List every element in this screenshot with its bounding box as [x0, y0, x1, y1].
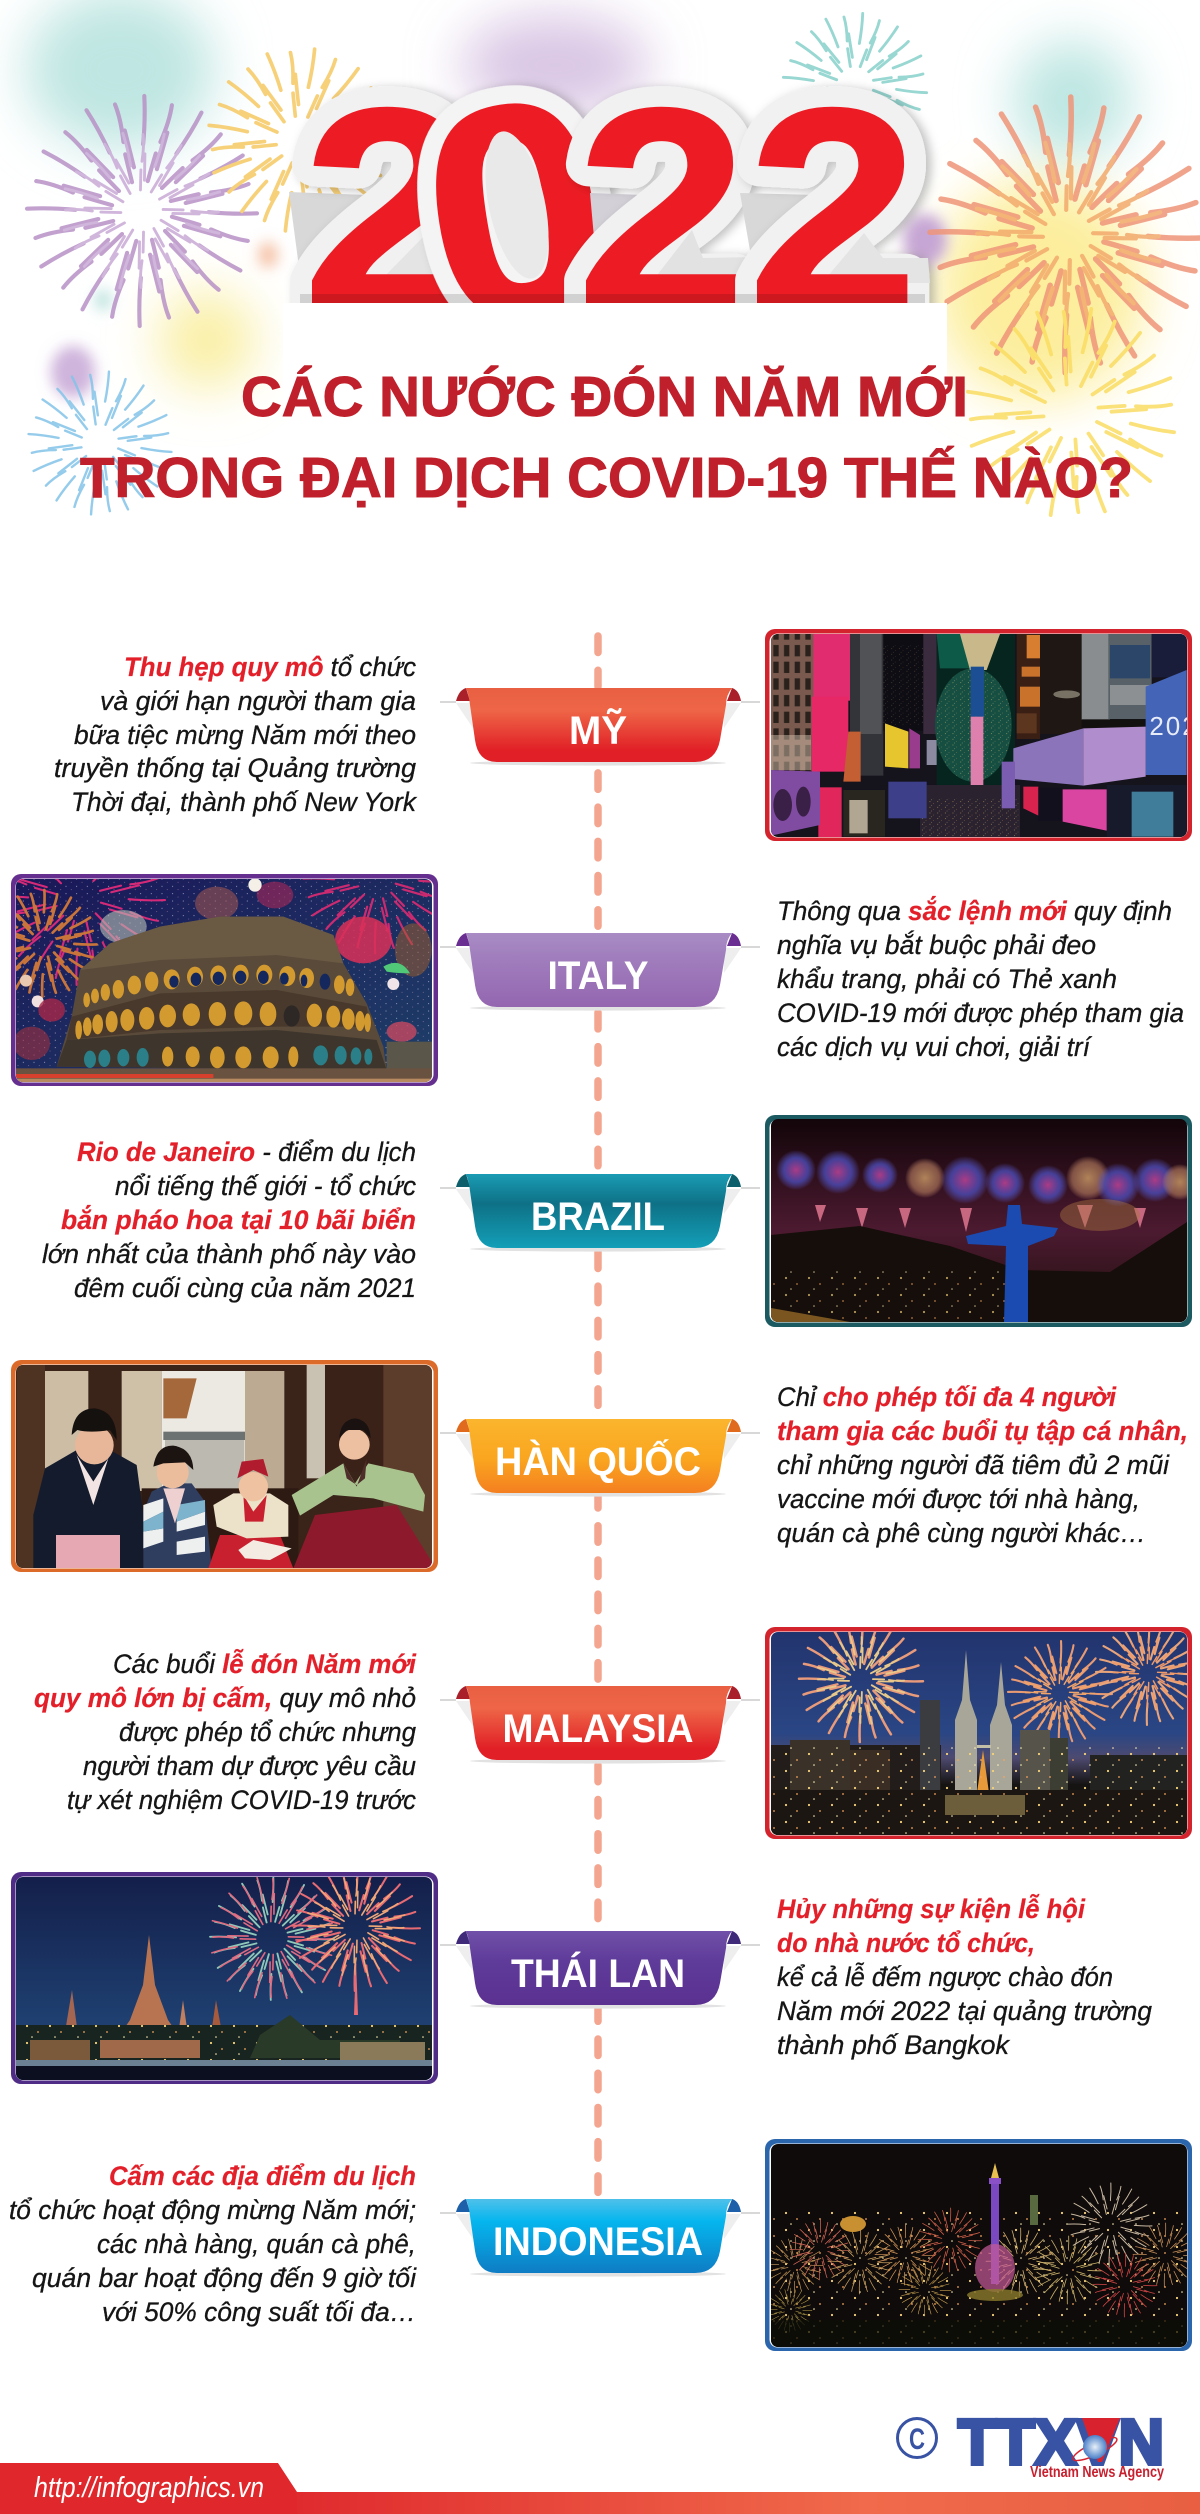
text: Brazil: đêm cuối cùng của năm 2021	[74, 1273, 416, 1303]
text: Italy: khẩu trang, phải có Thẻ xanh	[777, 964, 1117, 994]
text: Hàn Quốc	[777, 1382, 1188, 1548]
heading: 2022: 2	[748, 49, 918, 369]
text: Brazil	[42, 1137, 416, 1303]
header: blurred colour glows	[25, 0, 1145, 400]
heading: 2022: 0	[403, 31, 629, 391]
row: MALAYSIA	[34, 1618, 1200, 1839]
ribbon: Malaysia	[440, 1686, 760, 1764]
text: Indonesia: quán bar hoạt động đến 9 giờ tối	[32, 2263, 417, 2293]
row: MỸ	[54, 625, 1200, 845]
text: Italy: COVID-19 mới được phép tham gia	[777, 998, 1184, 1028]
text: Thái Lan: do nhà nước tổ chức,	[777, 1928, 1035, 1958]
text: Thái Lan: kể cả lễ đếm ngược chào đón	[777, 1961, 1113, 1992]
heading: 2022: 2	[577, 49, 747, 369]
text: Hàn Quốc: vaccine mới được tới nhà hàng,	[777, 1484, 1140, 1514]
photo: Rio fireworks	[765, 1115, 1198, 1327]
text: Mỹ: Thu hẹp quy mô tổ chức	[124, 652, 416, 682]
text: Malaysia: được phép tổ chức nhưng	[119, 1717, 416, 1747]
icon: copyright: C	[909, 2423, 925, 2456]
photo: Times Square	[760, 625, 1200, 845]
ribbon: Thái Lan: THÁI LAN	[511, 1951, 685, 1996]
ribbon: Malaysia: MALAYSIA	[502, 1707, 694, 1751]
text: Indonesia: với 50% công suất tối đa…	[102, 2297, 416, 2327]
text: Mỹ: Thời đại, thành phố New York	[71, 787, 417, 817]
heading: 2022	[283, 31, 947, 403]
text: Italy	[777, 895, 1184, 1062]
text: Malaysia	[34, 1648, 416, 1815]
photo: Kuala Lumpur	[765, 1618, 1200, 1839]
row: BRAZIL	[42, 1115, 1198, 1327]
ribbon: Thái Lan	[440, 1931, 760, 2009]
heading: subtitle: CÁC NƯỚC ĐÓN NĂM MỚI	[241, 365, 968, 429]
text: Thái Lan: Hủy những sự kiện lễ hội	[777, 1893, 1085, 1924]
header: firework bursts	[21, 7, 1200, 534]
ribbon: Indonesia: INDONESIA	[493, 2220, 703, 2264]
row: INDONESIA	[9, 2139, 1197, 2351]
row: HÀN QUỐC	[11, 1360, 1188, 1572]
row: THÁI LAN	[11, 1862, 1152, 2084]
photo: Jakarta	[765, 2139, 1197, 2351]
text: Malaysia: người tham dự được yêu cầu	[83, 1751, 416, 1781]
text: Mỹ: truyền thống tại Quảng trường	[54, 753, 416, 783]
text: Italy: Thông qua sắc lệnh mới quy định	[777, 895, 1172, 926]
heading: 2022: 2	[303, 49, 473, 369]
heading: 2022: 2	[577, 49, 747, 369]
text: Hàn Quốc: Chỉ cho phép tối đa 4 người	[777, 1382, 1116, 1412]
heading: 2022: 0	[403, 31, 629, 391]
text: Malaysia: tự xét nghiệm COVID-19 trước	[67, 1785, 416, 1815]
text: Indonesia: tổ chức hoạt động mừng Năm mới;	[9, 2195, 416, 2225]
ribbon: Mỹ: MỸ	[569, 707, 627, 753]
ribbon: Brazil	[440, 1174, 760, 1252]
ribbon: Italy: ITALY	[548, 954, 649, 998]
text: Hàn Quốc: tham gia các buổi tụ tập cá nhân,	[777, 1416, 1188, 1446]
text: Brazil: nổi tiếng thế giới - tổ chức	[115, 1171, 416, 1201]
footer bar: http://infographics.vn	[34, 2472, 264, 2504]
ribbon: Hàn Quốc: HÀN QUỐC	[495, 1438, 701, 1484]
text: Malaysia: Các buổi lễ đón Năm mới	[113, 1648, 416, 1679]
text: Brazil: Rio de Janeiro - điểm du lịch	[77, 1137, 416, 1167]
heading: 2022: 2	[303, 49, 473, 369]
text: Mỹ	[54, 652, 417, 817]
wordmark: Vietnam News Agency	[1030, 2464, 1164, 2481]
text: Indonesia: các nhà hàng, quán cà phê,	[97, 2229, 416, 2259]
text: Malaysia: quy mô lớn bị cấm, quy mô nhỏ	[34, 1683, 416, 1713]
photo: Korean family	[11, 1360, 438, 1572]
text: Mỹ: bữa tiệc mừng Năm mới theo	[74, 720, 416, 750]
logo: TTXVN	[898, 2406, 1164, 2481]
text: Hàn Quốc: quán cà phê cùng người khác…	[777, 1518, 1146, 1548]
text: Italy: nghĩa vụ bắt buộc phải đeo	[777, 929, 1096, 960]
icon: copyright	[898, 2418, 936, 2458]
text: Brazil: lớn nhất của thành phố này vào	[42, 1239, 416, 1269]
text: Brazil: bắn pháo hoa tại 10 bãi biển	[61, 1204, 416, 1235]
row: ITALY	[11, 874, 1184, 1086]
timeline dashed line	[594, 636, 602, 2193]
photo: Colosseum	[11, 874, 438, 1086]
ribbon: Italy	[440, 933, 760, 1011]
text: Thái Lan	[777, 1893, 1152, 2060]
ribbon: Mỹ	[440, 688, 760, 766]
text: Indonesia: Cấm các địa điểm du lịch	[109, 2161, 416, 2191]
photo: Times Square: 202	[1149, 711, 1199, 741]
heading: subtitle: TRONG ĐẠI DỊCH COVID-19 THẾ NÀO?	[80, 445, 1133, 510]
footer bar	[0, 2463, 1200, 2514]
text: Thái Lan: thành phố Bangkok	[777, 2030, 1010, 2060]
text: Italy: các dịch vụ vui chơi, giải trí	[777, 1032, 1092, 1062]
text: Mỹ: và giới hạn người tham gia	[100, 686, 416, 716]
text: Indonesia	[9, 2161, 417, 2327]
ribbon: Indonesia	[440, 2199, 760, 2277]
text: Thái Lan: Năm mới 2022 tại quảng trường	[777, 1996, 1152, 2026]
heading: subtitle	[80, 365, 1133, 510]
photo: Bangkok	[11, 1862, 438, 2084]
heading: 2022: 2	[748, 49, 918, 369]
ribbon: Hàn Quốc	[440, 1419, 760, 1497]
wordmark: TTXVN	[958, 2406, 1164, 2478]
ribbon: Brazil: BRAZIL	[531, 1195, 665, 1239]
text: Hàn Quốc: chỉ những người đã tiêm đủ 2 mũi	[777, 1450, 1170, 1480]
